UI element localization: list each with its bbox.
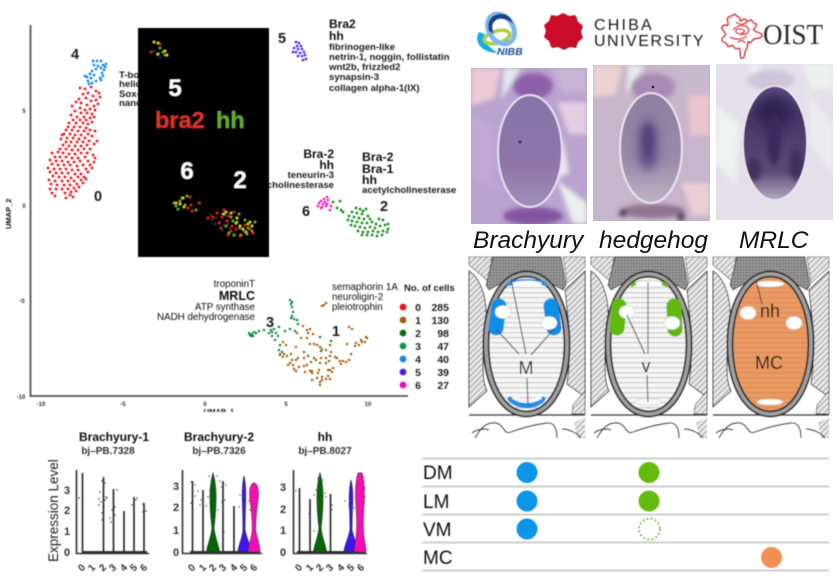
legend: number of cells	[400, 283, 455, 392]
axis tick labels: -5	[120, 402, 126, 408]
violin: Brachyury-1: Brachyury-1	[79, 430, 149, 444]
gene list: cluster 6	[240, 147, 334, 191]
cluster 2 green dots	[333, 201, 388, 236]
cluster label 3: 3	[266, 315, 274, 331]
legend: number of cells: 130	[431, 315, 449, 327]
violin: Brachyury-2: 2	[173, 502, 179, 514]
cluster label 1: 1	[332, 324, 340, 340]
inset red cells	[151, 44, 253, 236]
violin: Brachyury-1: 3	[64, 485, 70, 497]
axis tick labels: -10	[17, 395, 26, 401]
violin: Brachyury-1: 1	[64, 526, 70, 538]
violin: Brachyury-1: 3	[107, 562, 119, 574]
inset label hh: hh	[216, 107, 245, 133]
violin: Brachyury-2: 0	[186, 562, 198, 574]
gene list: cluster 1: pleiotrophin	[332, 302, 383, 313]
legend: number of cells: 2	[415, 328, 421, 340]
inset cluster label 2: 2	[233, 167, 247, 194]
violin: Brachyury-1: 0	[76, 562, 88, 574]
violin: hh: 3	[280, 482, 286, 494]
cluster label 0: 0	[94, 189, 102, 205]
gene list: cluster 6: acetylcholinesterase	[240, 180, 334, 191]
schematic: Brachyury expression	[469, 257, 585, 438]
row: VM	[423, 518, 660, 541]
gene list: cluster 3: troponinT	[214, 279, 255, 290]
violin: Brachyury-1: 2	[97, 562, 109, 574]
violin: Brachyury-1	[64, 430, 150, 574]
violin: Brachyury-2: 3	[217, 562, 229, 574]
label: M: M	[518, 358, 534, 378]
gene list: cluster 5: hh	[329, 29, 344, 43]
gene list: cluster 3	[157, 279, 256, 323]
violin: Brachyury-2: 3	[173, 481, 179, 493]
gene list: cluster 6: Bra-2	[303, 147, 334, 161]
cluster label 2: 2	[380, 199, 388, 215]
logo: OIST: OIST	[763, 19, 823, 51]
gene list: cluster 5: Bra2	[329, 17, 356, 31]
legend: number of cells: 98	[437, 328, 449, 340]
gene list: cluster 2: Bra-1	[362, 162, 394, 176]
axis tick labels: -5	[19, 299, 25, 305]
cluster label 4: 4	[71, 47, 79, 63]
legend: number of cells: 3	[415, 341, 421, 353]
y axis	[30, 25, 32, 397]
cluster 6 magenta dots	[318, 197, 331, 210]
row: MC	[423, 547, 782, 569]
violin: Brachyury-2: 6	[248, 562, 260, 574]
logo: NIBB	[477, 9, 523, 58]
violin: hh: 2	[314, 562, 326, 574]
violin: hh: 0	[293, 562, 305, 574]
gene list: cluster 4: nanos	[119, 98, 147, 109]
violin: Brachyury-1: 6	[138, 562, 150, 574]
schematic: hedgehog expression	[591, 257, 707, 438]
axis tick labels: 0	[22, 204, 26, 210]
gene list: cluster 5: fibrinogen-like	[329, 42, 395, 53]
violin: Brachyury-1: 0	[64, 547, 70, 559]
legend: number of cells: 5	[415, 367, 421, 379]
gene list: cluster 3: MRLC	[219, 289, 255, 303]
violin: hh	[280, 430, 367, 574]
violin: Brachyury-2: 4	[228, 562, 240, 574]
axis tick labels: 5	[22, 109, 26, 115]
gene list: cluster 3: NADH dehydrogenase	[157, 312, 256, 323]
gene list: cluster 4: T-box	[119, 70, 145, 81]
axis tick labels: 10	[365, 402, 372, 408]
gene list: cluster 1: neuroligin-2	[332, 292, 383, 303]
gene list: cluster 3: ATP synthase	[195, 302, 256, 313]
axis tick labels	[17, 109, 372, 408]
inset cluster label 6: 6	[180, 158, 194, 185]
legend: number of cells: 39	[437, 367, 449, 379]
legend: number of cells: 0	[415, 302, 421, 314]
cluster 5 violet dots	[293, 42, 306, 60]
gene list: cluster 4: helicase	[119, 79, 157, 90]
gene list: cluster 5	[328, 17, 450, 94]
gene list: cluster 1: semaphorin 1A	[332, 282, 398, 293]
violin: hh: 1	[280, 525, 286, 537]
photo: MRLC in situ	[716, 64, 833, 220]
gene list: cluster 5: collagen alpha-1(IX)	[329, 83, 420, 94]
violin: Brachyury-2	[173, 430, 262, 574]
gene list: cluster 5: netrin-1, noggin, follistatin	[329, 52, 450, 63]
violin: Brachyury-2: bj–PB.7326	[192, 446, 246, 457]
heading: MRLC: MRLC	[739, 227, 809, 254]
cluster label 6: 6	[302, 204, 310, 220]
violin: hh: 0	[280, 547, 286, 559]
legend: number of cells: No. of cells	[404, 283, 455, 294]
label: nh: nh	[760, 301, 780, 321]
row: VM: VM	[423, 520, 452, 541]
violin: Brachyury-1: 5	[128, 562, 140, 574]
violin: Brachyury-1: bj–PB.7328	[81, 446, 135, 457]
violin: Brachyury-1: 2	[64, 505, 70, 517]
violin: Brachyury-1: 4	[118, 562, 130, 574]
legend: number of cells: 27	[437, 380, 449, 392]
cluster 4 blue dots	[85, 61, 106, 84]
axis tick labels: 5	[284, 402, 288, 408]
violin: Brachyury-2: 2	[207, 562, 219, 574]
photo: Brachyury in situ	[471, 68, 587, 225]
violin: Brachyury-1: 1	[86, 562, 98, 574]
violin: Brachyury-2: 0	[173, 547, 179, 559]
violin: hh: bj–PB.8027	[298, 446, 352, 457]
logo: NIBB: NIBB	[497, 46, 523, 58]
gene list: cluster 1	[332, 282, 398, 313]
label: v: v	[642, 356, 650, 376]
row: MC: MC	[423, 548, 453, 569]
inset dark cells	[154, 51, 236, 230]
violin plots	[46, 430, 367, 574]
gene list: cluster 2: acetylcholinesterase	[362, 185, 456, 196]
legend: number of cells: 285	[431, 302, 449, 314]
gene list: cluster 4: Sox-2	[119, 89, 145, 100]
photo: hedgehog in situ	[593, 65, 710, 221]
violin: hh: 2	[280, 504, 286, 516]
violin: hh: 3	[324, 562, 336, 574]
legend: number of cells: 6	[415, 380, 421, 392]
row: LM: LM	[423, 492, 449, 513]
cluster label 5: 5	[278, 31, 286, 47]
violin: hh: 1	[304, 562, 316, 574]
violin: Brachyury-2: 5	[238, 562, 250, 574]
inset yellow cells	[154, 42, 252, 232]
logo: Chiba University: UNIVERSITY	[594, 33, 705, 50]
gene list: cluster 5: wnt2b, frizzled2	[328, 62, 400, 73]
cluster 1 brown dots	[280, 303, 367, 385]
cluster 0 red dots	[48, 87, 100, 198]
violin: hh: 4	[335, 562, 347, 574]
violin: Brachyury-2: 1	[197, 562, 209, 574]
y axis title: UMAP_2	[4, 199, 13, 229]
legend: number of cells: 4	[415, 354, 421, 366]
violin: Brachyury-2: Brachyury-2	[184, 430, 254, 444]
gene list: cluster 2: hh	[362, 173, 377, 187]
legend: number of cells: 47	[437, 341, 449, 353]
gene list: cluster 2: Bra-2	[362, 150, 394, 164]
violin: Brachyury-2: 1	[173, 525, 179, 537]
axis tick labels: -10	[37, 402, 46, 408]
gene list: cluster 4	[119, 70, 157, 109]
violin: hh: hh	[318, 430, 332, 444]
gene list: cluster 2	[362, 150, 456, 196]
row: DM: DM	[423, 463, 453, 484]
inset label bra2: bra2	[155, 107, 205, 133]
cluster 3 green dots	[249, 300, 331, 356]
label: MC: MC	[755, 353, 783, 373]
legend: number of cells: 40	[437, 354, 449, 366]
black inset panel: bra2 and hh co-expression	[138, 28, 269, 257]
schematic: MRLC expression	[713, 257, 830, 438]
x axis	[30, 395, 408, 397]
violin: hh: 5	[345, 562, 357, 574]
x axis title: UMAP_1	[204, 407, 234, 416]
y axis title: Expression Level: Expression Level	[46, 459, 61, 562]
axis tick labels: 0	[203, 402, 207, 408]
inset cluster label 5: 5	[168, 75, 182, 102]
heading: hedgehog: hedgehog	[599, 227, 708, 254]
logo: OIST	[722, 14, 823, 58]
gene list: cluster 6: hh	[319, 158, 334, 172]
heading: Brachyury: Brachyury	[473, 227, 585, 254]
row: LM	[423, 490, 660, 513]
row: DM	[423, 462, 660, 484]
UMAP scatter plot	[4, 17, 456, 416]
gene list: cluster 5: synapsin-3	[329, 72, 379, 83]
violin: hh: 6	[355, 562, 367, 574]
gene list: cluster 6: teneurin-3	[288, 170, 334, 181]
logo: Chiba University	[544, 13, 705, 50]
inset green cells	[160, 48, 255, 235]
logo: Chiba University: CHIBA	[594, 17, 654, 34]
expression table	[422, 458, 829, 570]
legend: number of cells: 1	[415, 315, 421, 327]
